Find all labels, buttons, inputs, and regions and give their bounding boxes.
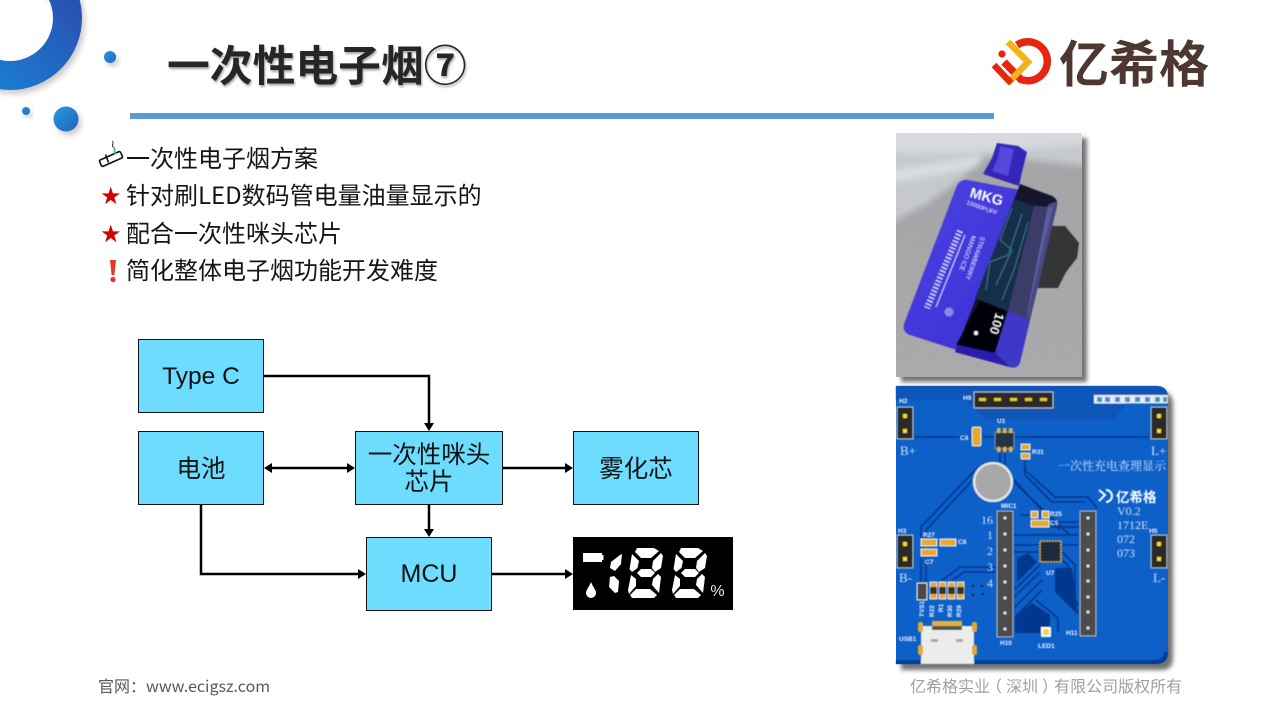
photo: PCB board: B-	[899, 570, 912, 585]
photo: PCB board	[895, 385, 1176, 673]
PCB silkscreen labels: MIC1	[1001, 503, 1017, 510]
PCB silkscreen labels: R22	[929, 605, 936, 617]
PCB silkscreen labels: C5	[1050, 520, 1059, 527]
photo: PCB board: 073	[1117, 546, 1135, 560]
box: disposable mic chip	[355, 431, 503, 505]
title: 一次性电子烟⑦	[167, 32, 467, 94]
footer: website: 官网：www.ecigsz.com	[98, 673, 270, 697]
footer: copyright: 亿希格实业（深圳）有限公司版权所有	[910, 673, 1182, 697]
PCB silkscreen labels: R25	[1050, 511, 1062, 518]
top right strip	[1094, 395, 1168, 404]
icon: red star: ★	[100, 182, 122, 210]
photo: PCB board: 072	[1117, 532, 1135, 546]
PCB silkscreen labels: H10	[1000, 640, 1012, 647]
box: atomizer: 雾化芯	[599, 450, 673, 484]
photo: PCB board: 亿希格	[1116, 486, 1157, 506]
bullet text 2: 针对刷LED数码管电量油量显示的	[126, 176, 482, 211]
photo: MKG disposable vape: MKG	[968, 185, 1005, 210]
side headers	[897, 407, 913, 439]
logo wordmark: 亿希格	[1059, 25, 1209, 97]
PCB silkscreen labels: U7	[1046, 570, 1055, 577]
PCB silkscreen labels: H2	[899, 398, 908, 405]
photo: PCB board: 2	[987, 544, 993, 558]
photo: PCB board: 16	[981, 513, 993, 527]
PCB silkscreen labels: C8	[958, 539, 967, 546]
icon: cigarette	[98, 140, 124, 168]
PCB silkscreen labels: U1	[997, 418, 1006, 425]
PCB silkscreen labels: H3	[898, 528, 907, 535]
U7	[1040, 541, 1061, 562]
title underline	[130, 113, 994, 119]
photo: PCB board: L-	[1153, 570, 1165, 585]
PCB silkscreen labels: H11	[1066, 630, 1078, 637]
decorative circles: ring and dots	[0, 0, 121, 138]
PCB silkscreen labels: USB1	[899, 636, 917, 643]
logo mark	[992, 38, 1052, 86]
box: battery	[138, 431, 264, 505]
box: atomizer	[573, 431, 699, 505]
PCB silkscreen labels: R1	[938, 603, 945, 612]
company logo	[992, 25, 1209, 97]
microphone	[974, 463, 1012, 501]
photo: PCB board: B+	[900, 443, 916, 458]
photo: PCB board: 4	[987, 576, 993, 590]
icon: red exclamation	[110, 260, 116, 282]
PCB silkscreen labels: R27	[923, 532, 935, 539]
PCB silkscreen labels: H9	[963, 395, 972, 402]
PCB silkscreen labels: R30	[947, 605, 954, 617]
photo: MKG disposable vape: 100	[986, 311, 1007, 336]
PCB silkscreen labels	[898, 395, 1158, 650]
PCB silkscreen labels: H5	[1149, 528, 1158, 535]
LED1	[1041, 627, 1051, 637]
box: battery: 电池	[176, 450, 226, 484]
photo: MKG disposable vape: 10000PUFF	[965, 200, 998, 217]
photo: PCB board: 一次性充电查理显示	[1058, 457, 1167, 474]
H9 header	[974, 392, 1053, 408]
icon: red star: ★	[100, 220, 122, 248]
bullet text 1: 一次性电子烟方案	[126, 139, 318, 174]
PCB silkscreen labels: C7	[925, 559, 934, 566]
photo: PCB board: 1712E	[1117, 518, 1148, 532]
photo: PCB board: 3	[987, 560, 993, 574]
block diagram	[138, 339, 733, 611]
box: Type C: Type C	[162, 362, 240, 390]
box: disposable mic chip: 一次性咪头	[368, 436, 490, 471]
box: Type C	[138, 339, 264, 413]
PCB silkscreen labels: R29	[956, 605, 963, 617]
bullet list	[98, 139, 482, 286]
photo: MKG disposable vape	[896, 133, 1090, 385]
small parts	[921, 427, 1049, 599]
photo: PCB board: L+	[1151, 443, 1166, 458]
U1	[995, 432, 1014, 449]
LED digit display: %	[710, 583, 725, 600]
photo: MKG disposable vape: STRAWBERRY	[963, 235, 986, 281]
USB connector	[932, 621, 962, 627]
PCB silkscreen labels: LED1	[1038, 643, 1055, 650]
LED digit display	[573, 537, 733, 610]
box: MCU	[366, 537, 492, 611]
box: disposable mic chip: 芯片	[404, 463, 454, 498]
bullet text 4: 简化整体电子烟功能开发难度	[126, 251, 438, 286]
bullet text 3: 配合一次性咪头芯片	[126, 214, 342, 249]
PCB silkscreen labels: R31	[1032, 449, 1044, 456]
photo: MKG disposable vape: MANGO ICE	[957, 234, 977, 272]
box: MCU: MCU	[401, 560, 457, 588]
photo: PCB board: V0.2	[1117, 504, 1141, 518]
long headers	[997, 511, 1013, 637]
PCB silkscreen labels: TVS1	[919, 600, 926, 617]
PCB silkscreen labels: C9	[960, 435, 969, 442]
photo: PCB board: 1	[987, 528, 993, 542]
